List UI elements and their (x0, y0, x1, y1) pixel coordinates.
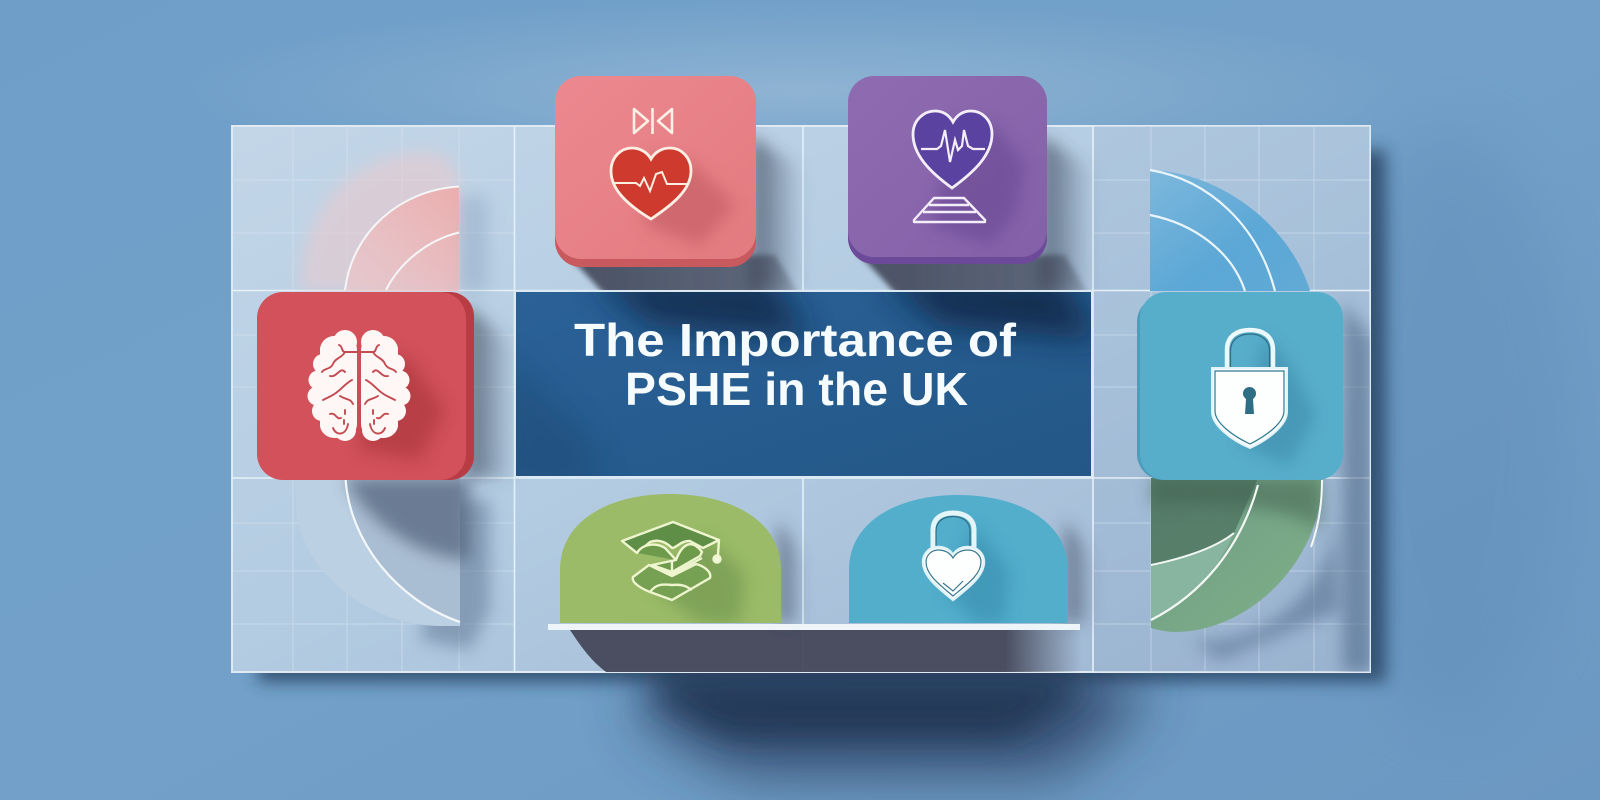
icon shadow: heart lock (950, 531, 1012, 623)
shelf (548, 624, 1080, 630)
title text: PSHE in the UK (625, 363, 968, 415)
icon: brain (308, 330, 410, 441)
icon shadow: padlock (1244, 342, 1315, 464)
infographic canvas (231, 18, 1524, 800)
decorative quarter: faded pink, upper left (300, 152, 488, 291)
decorative quarter: blue, upper right (1150, 170, 1310, 291)
icon: bow tie (634, 108, 672, 134)
arch: blue heart padlock (849, 495, 1093, 623)
arch shadow (1065, 520, 1093, 623)
shelf cast shadow (570, 630, 1082, 672)
title panel (514, 290, 1093, 478)
icon shadow: heart and base (930, 120, 1025, 245)
icon shadow: brain (360, 345, 445, 460)
board drop shadow (258, 150, 1386, 775)
card: pink heart (555, 76, 756, 267)
board panel (232, 126, 1370, 672)
icon: shield padlock (1212, 330, 1287, 448)
icon: heart with pulse (611, 148, 691, 219)
icon: graduation cap and book (622, 522, 720, 600)
card: purple heart (848, 76, 1047, 264)
card: red brain (257, 292, 474, 480)
icon: heart padlock (923, 513, 984, 600)
card: teal padlock (1137, 292, 1343, 480)
arch shadow (778, 520, 803, 623)
title text: The Importance of (574, 314, 1017, 366)
icon: stepped base (914, 198, 985, 222)
arch: green graduation cap (560, 494, 803, 623)
card cast shadows on board (466, 135, 1372, 672)
decorative quarter: pale, lower left (296, 478, 490, 650)
title text (574, 314, 1017, 415)
icon shadow: heart (645, 155, 735, 245)
icon shadow: cap (658, 542, 749, 623)
icon: heart with heartbeat (913, 111, 992, 188)
decorative quarter: green, lower right (1151, 478, 1340, 660)
